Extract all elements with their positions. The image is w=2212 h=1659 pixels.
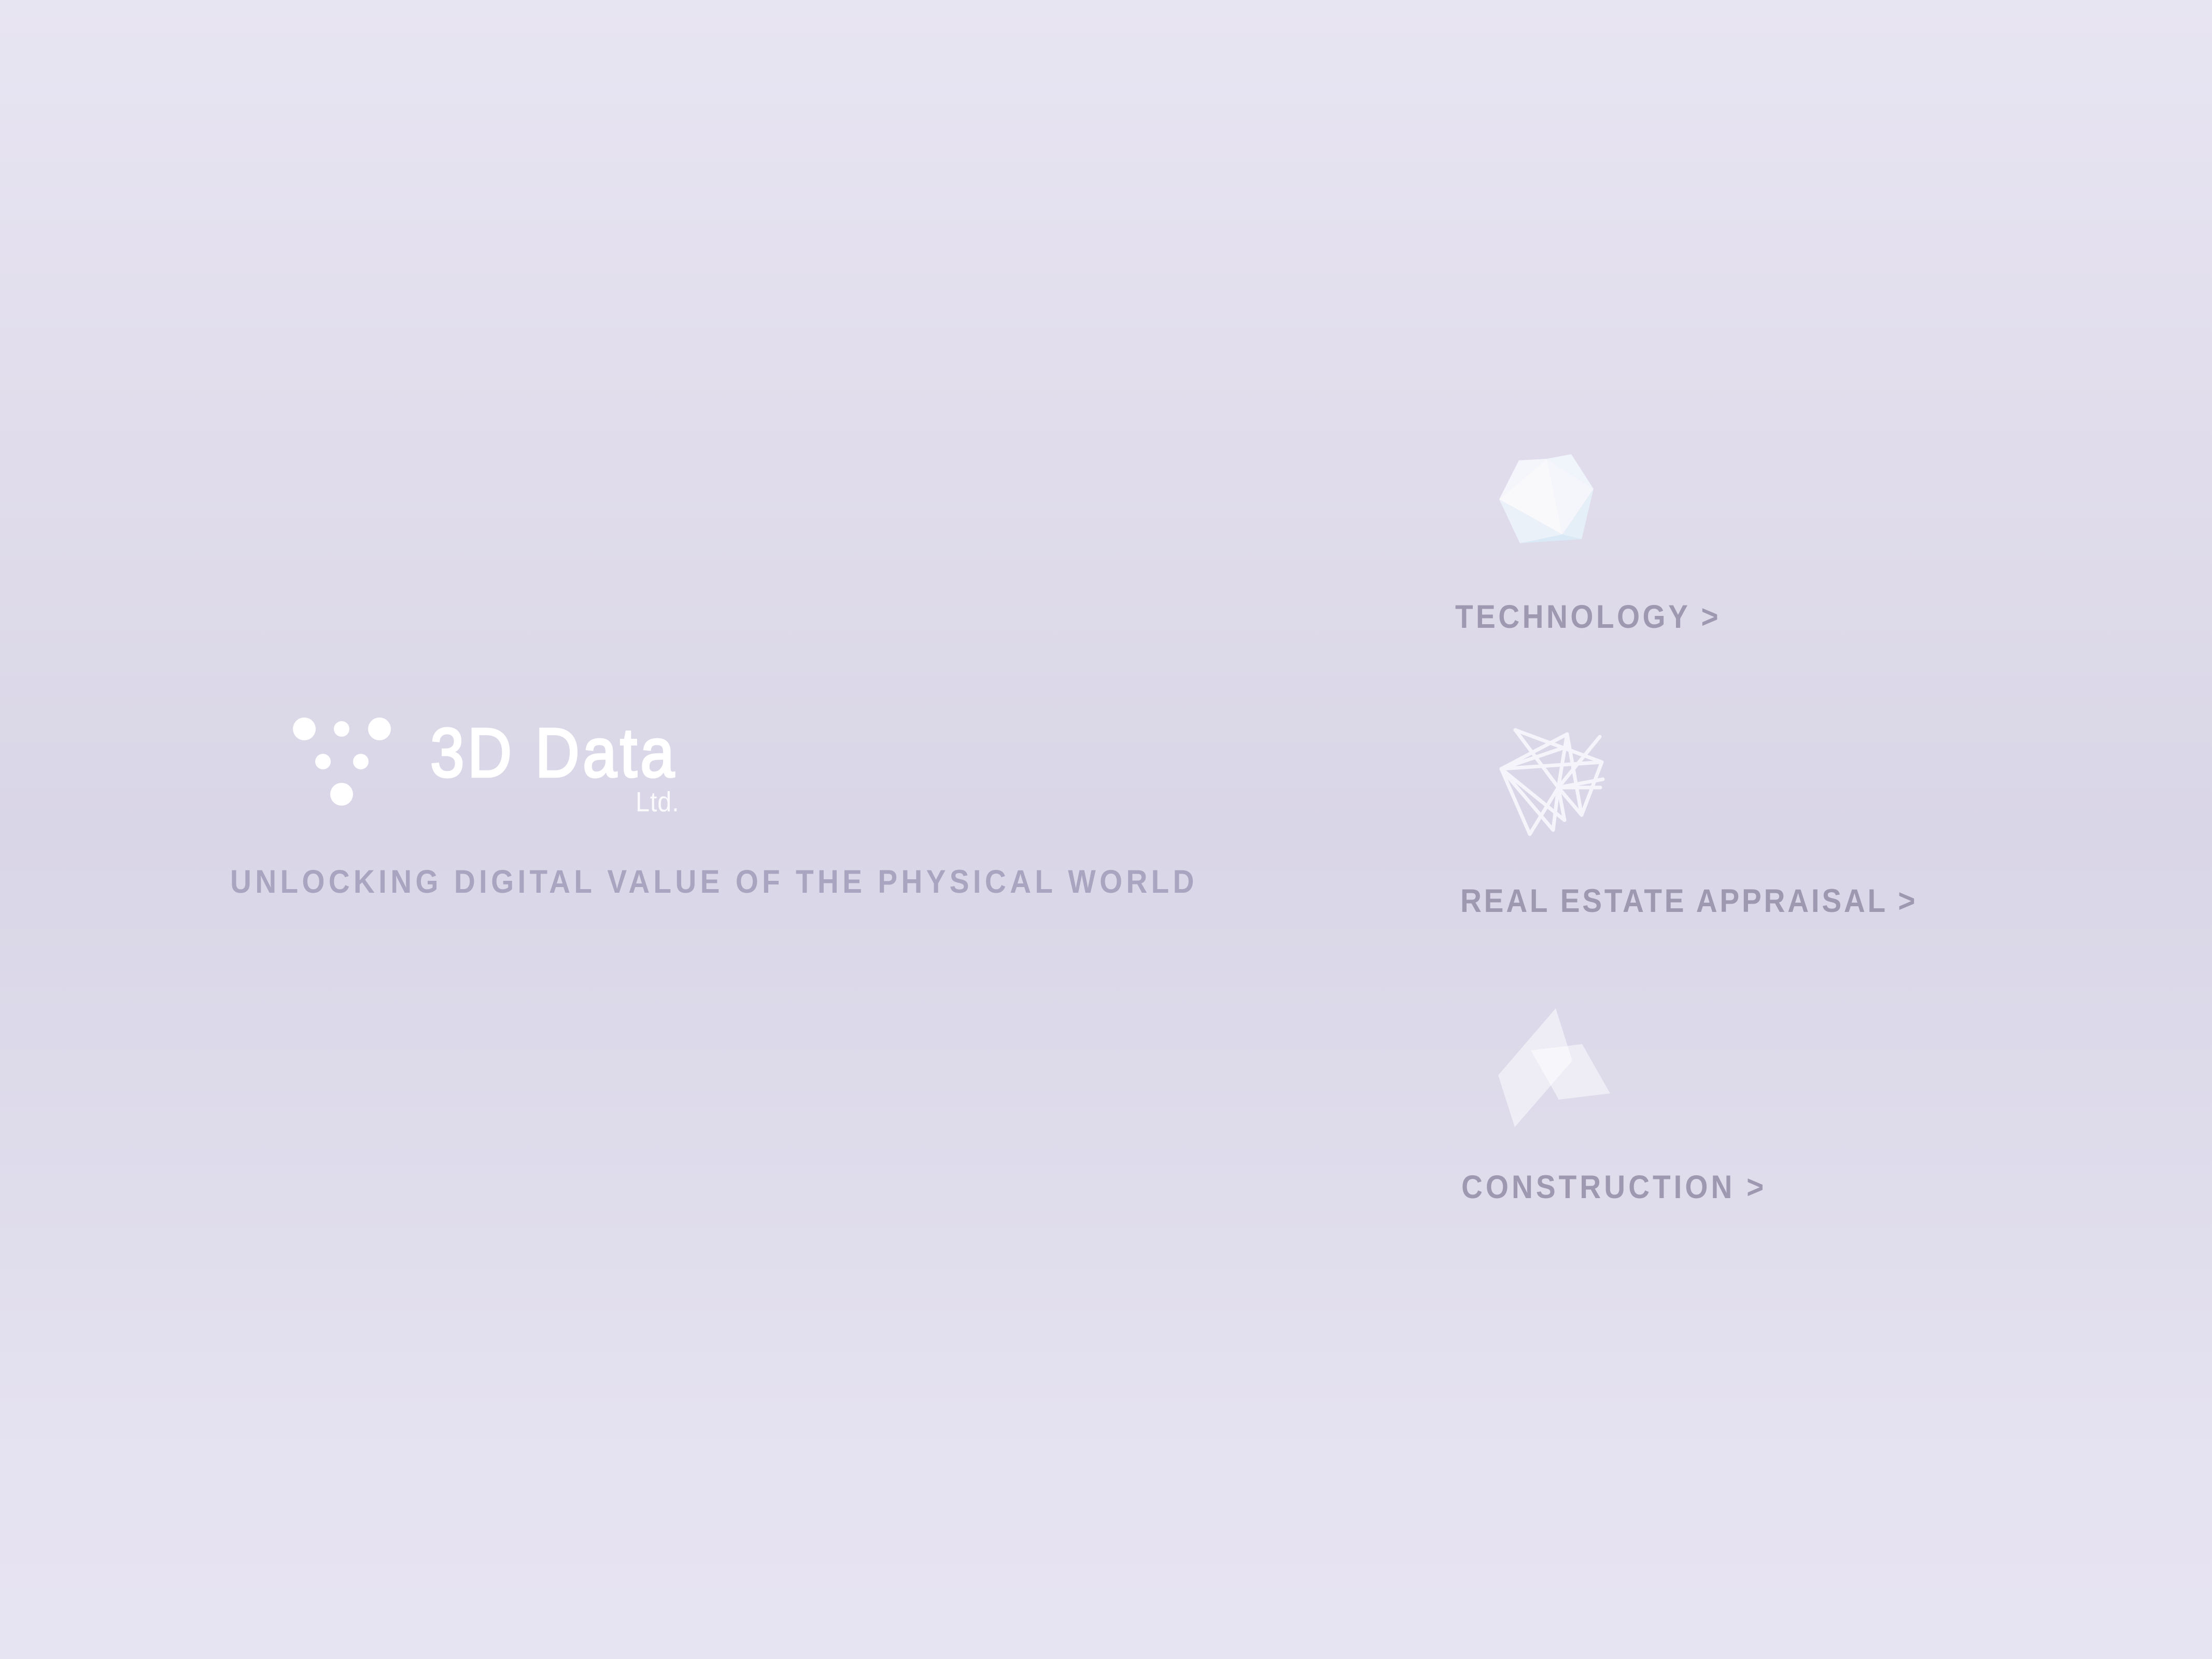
tagline: UNLOCKING DIGITAL VALUE OF THE PHYSICAL WORLD xyxy=(230,863,1194,900)
logo suffix: Ltd. xyxy=(636,786,679,818)
logo: 3D Data Ltd. xyxy=(293,714,679,818)
icon: logo dots xyxy=(293,718,391,806)
link: construction: CONSTRUCTION > xyxy=(1461,1169,1764,1205)
icon: technology faceted polyhedron xyxy=(1499,454,1594,543)
icon: real estate wireframe network xyxy=(1501,730,1603,834)
logo wordmark: 3D Data xyxy=(430,714,675,792)
link: technology: TECHNOLOGY > xyxy=(1455,598,1718,635)
icon: construction overlapping planes xyxy=(1498,1008,1610,1127)
link: real estate appraisal: REAL ESTATE APPRAISAL > xyxy=(1460,882,1915,919)
